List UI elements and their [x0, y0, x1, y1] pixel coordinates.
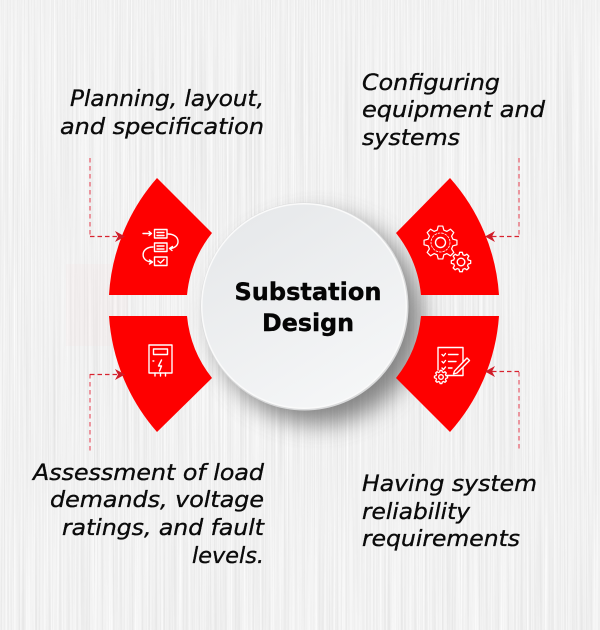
label: planning — [60, 86, 264, 140]
icon: planning flowchart — [143, 230, 178, 266]
center title: Design — [262, 309, 354, 337]
label: planning: Planning, layout, — [70, 86, 264, 112]
label: reliability — [362, 471, 537, 552]
label: assessment: Assessment of load — [31, 460, 265, 486]
faint watermark — [66, 264, 128, 346]
label: assessment: demands, voltage — [50, 487, 264, 513]
center title — [234, 278, 382, 337]
label: configuring: Configuring — [362, 70, 500, 96]
label: assessment: levels. — [192, 543, 264, 569]
label: assessment — [31, 460, 265, 569]
label: reliability: reliability — [362, 499, 471, 525]
disc shadow — [214, 216, 422, 424]
segment: bottom left — [109, 316, 212, 432]
connector: bottom right — [485, 366, 519, 450]
center title: Substation — [234, 278, 382, 306]
label: planning: and specification — [60, 114, 264, 140]
label: configuring — [362, 70, 546, 151]
icon: electrical panel — [149, 345, 172, 376]
label: reliability: Having system — [362, 471, 537, 497]
label: configuring: systems — [362, 125, 460, 151]
label: assessment: ratings, and fault — [62, 515, 265, 541]
central disc — [200, 202, 408, 410]
label: configuring: equipment and — [362, 97, 546, 123]
segment: top right — [396, 178, 499, 295]
segment: bottom right — [396, 316, 499, 432]
connector: bottom left — [90, 369, 125, 452]
connector: top right — [485, 158, 519, 242]
connector: top left — [90, 158, 125, 242]
segment: top left — [109, 178, 212, 295]
icon: checklist with gear — [434, 348, 470, 384]
label: reliability: requirements — [362, 526, 520, 552]
icon: gears — [424, 226, 471, 272]
